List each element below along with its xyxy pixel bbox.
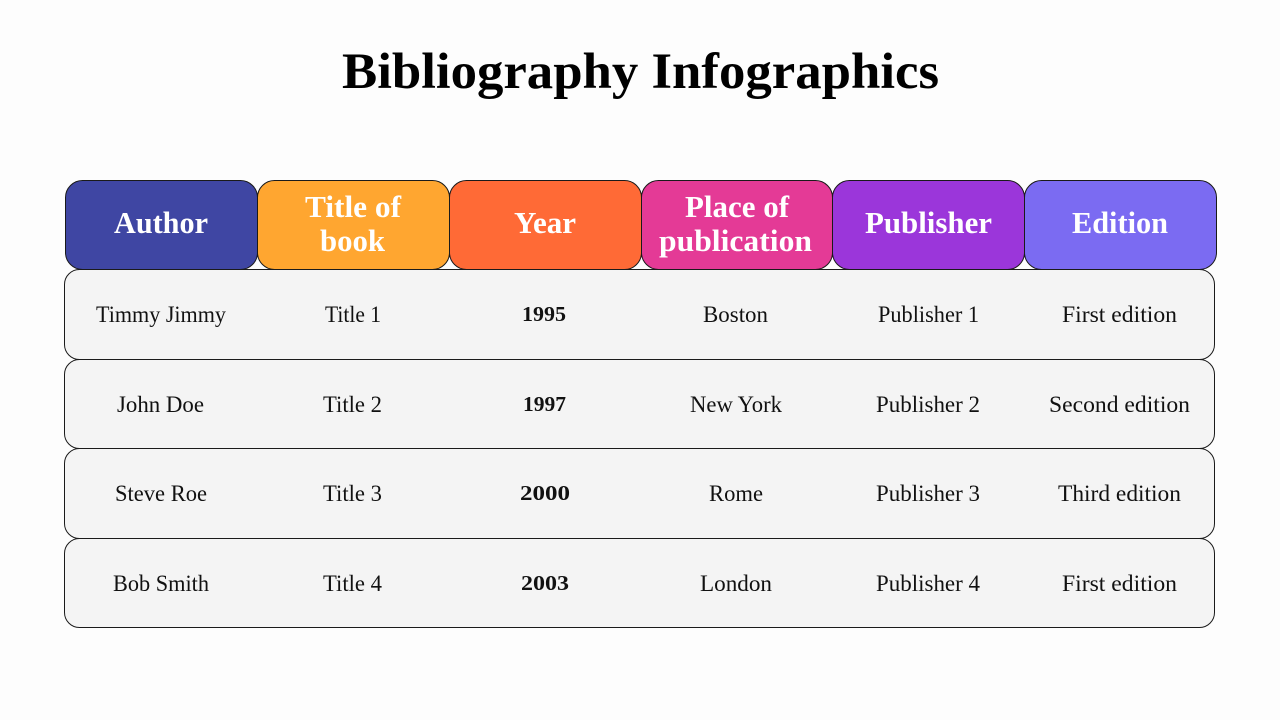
table rows bbox=[64, 270, 1214, 628]
row 1: Boston bbox=[703, 302, 768, 327]
row 2: Second edition bbox=[1049, 392, 1191, 417]
header: Place of publication bbox=[642, 180, 832, 270]
row 1: 1995 bbox=[522, 302, 566, 326]
row 2: New York bbox=[690, 392, 782, 417]
row 1: Publisher 1 bbox=[878, 302, 979, 327]
row 2: Title 2 bbox=[323, 392, 382, 417]
header: Year bbox=[450, 180, 642, 270]
title: Bibliography Infographics bbox=[342, 44, 939, 100]
header: Author: Author bbox=[114, 205, 208, 240]
header: Place of publication: publication bbox=[659, 223, 812, 258]
row 3: Rome bbox=[709, 481, 763, 506]
header: Year: Year bbox=[514, 205, 576, 240]
row 3: Steve Roe bbox=[115, 481, 207, 506]
table header bbox=[66, 180, 1216, 270]
row 2 bbox=[64, 360, 1214, 448]
row 2: 1997 bbox=[523, 392, 566, 416]
row 1 bbox=[64, 270, 1214, 360]
header: Title of book: Title of bbox=[305, 189, 402, 224]
row 4: Title 4 bbox=[323, 571, 382, 596]
header: Place of publication: Place of bbox=[685, 189, 790, 224]
row 1: Timmy Jimmy bbox=[96, 302, 226, 327]
row 3: Publisher 3 bbox=[876, 481, 980, 506]
row 3: Title 3 bbox=[323, 481, 382, 506]
header: Publisher: Publisher bbox=[865, 205, 992, 240]
row 3: Third edition bbox=[1058, 481, 1182, 506]
header: Title of book bbox=[258, 180, 450, 270]
row 4: 2003 bbox=[521, 571, 569, 595]
row 1: Title 1 bbox=[325, 302, 381, 327]
row 4 bbox=[64, 538, 1214, 628]
header: Edition bbox=[1024, 180, 1216, 270]
header: Title of book: book bbox=[320, 223, 386, 258]
header: Publisher bbox=[832, 180, 1024, 270]
row 3: 2000 bbox=[520, 481, 570, 505]
row 3 bbox=[64, 448, 1214, 538]
row 2: John Doe bbox=[117, 392, 204, 417]
row 4: First edition bbox=[1062, 571, 1178, 596]
row 4: Publisher 4 bbox=[876, 571, 980, 596]
row 4: Bob Smith bbox=[113, 571, 209, 596]
row 1: First edition bbox=[1062, 302, 1178, 327]
header: Author bbox=[66, 180, 258, 270]
row 2: Publisher 2 bbox=[876, 392, 980, 417]
row 4: London bbox=[700, 571, 772, 596]
header: Edition: Edition bbox=[1072, 205, 1168, 240]
